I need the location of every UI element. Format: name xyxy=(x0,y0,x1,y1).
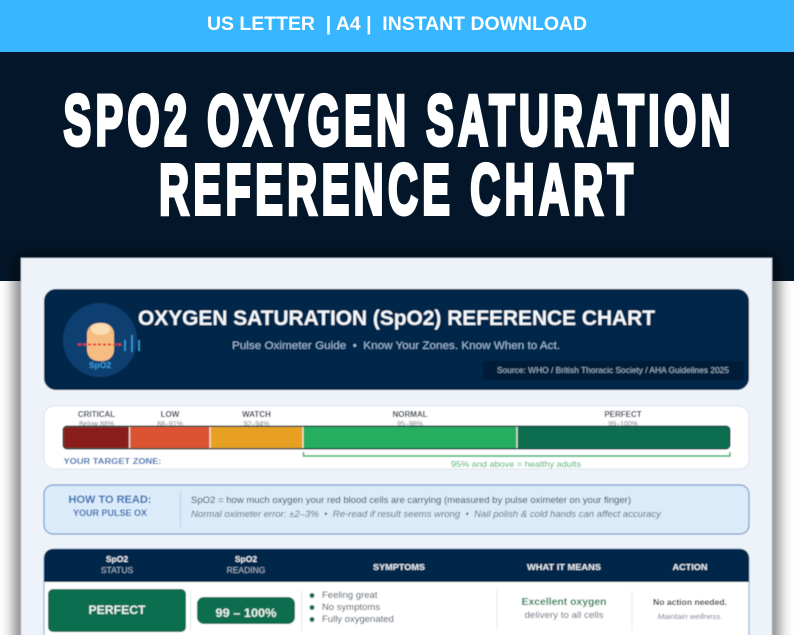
symptoms list: Fully oxygenated xyxy=(322,614,394,625)
main title: SPO2 OXYGEN SATURATION xyxy=(64,81,731,161)
table header: ACTION xyxy=(672,562,708,572)
table header: READING xyxy=(227,565,265,575)
table header: SpO2 xyxy=(235,554,257,564)
panel: saturation scale xyxy=(44,406,749,469)
meaning xyxy=(522,597,606,621)
scale labels: 95–98% xyxy=(397,421,423,428)
symptoms list xyxy=(310,590,394,625)
table header xyxy=(44,549,749,582)
panel: how to read: YOUR PULSE OX xyxy=(73,508,147,518)
scale labels: 99–100% xyxy=(608,421,638,428)
meaning: delivery to all cells xyxy=(524,610,604,621)
status badge: PERFECT xyxy=(88,603,146,617)
sheet shadow xyxy=(14,254,779,635)
scale labels: WATCH xyxy=(242,410,271,419)
scale labels: PERFECT xyxy=(604,410,642,419)
status badge xyxy=(48,589,186,632)
scale labels: NORMAL xyxy=(392,410,428,419)
row: perfect xyxy=(48,589,727,632)
top banner xyxy=(0,0,794,52)
panel: how to read: Normal oximeter error: ±2–3% • Re-read if result seems wrong • Nail polish & cold hands can affect accuracy xyxy=(191,509,662,519)
action: Maintain wellness. xyxy=(658,612,722,621)
table header: STATUS xyxy=(101,565,133,575)
document sheet xyxy=(21,258,772,635)
top banner: US LETTER | A4 | INSTANT DOWNLOAD xyxy=(207,13,587,35)
scale labels: 92–94% xyxy=(244,421,269,428)
scale labels: Below 88% xyxy=(79,421,114,428)
table header: SYMPTOMS xyxy=(373,562,425,572)
target zone note: 95% and above = healthy adults xyxy=(451,459,581,469)
scale labels: LOW xyxy=(161,410,180,419)
panel: chart header xyxy=(44,289,749,390)
source note xyxy=(483,361,744,380)
action: No action needed. xyxy=(653,597,727,607)
scale bar xyxy=(63,426,730,449)
table header: SpO2 xyxy=(106,554,128,564)
symptoms list: Feeling great xyxy=(322,590,378,601)
dark title band xyxy=(0,52,794,281)
icon: finger with pulse oximeter: SpO2 xyxy=(89,360,111,370)
header title: OXYGEN SATURATION (SpO2) REFERENCE CHART xyxy=(138,307,655,330)
scale labels xyxy=(78,410,642,428)
scale labels: 88–91% xyxy=(157,421,183,428)
target zone label: YOUR TARGET ZONE: xyxy=(64,456,162,466)
action xyxy=(653,597,727,621)
symptoms list: No symptoms xyxy=(322,602,380,613)
table header: WHAT IT MEANS xyxy=(527,562,601,572)
target zone bracket xyxy=(304,452,730,456)
scale labels: CRITICAL xyxy=(78,410,115,419)
header subtitle: Pulse Oximeter Guide • Know Your Zones. Know When to Act. xyxy=(232,340,560,352)
main title xyxy=(64,81,731,230)
source note: Source: WHO / British Thoracic Society / AHA Guidelines 2025 xyxy=(497,365,729,375)
how to read body: SpO2 = how much oxygen your red blood cells are carrying (measured by pulse oximeter on your finger) xyxy=(191,495,631,506)
meaning: Excellent oxygen xyxy=(522,597,606,608)
main title: REFERENCE CHART xyxy=(159,150,633,230)
how to read heading: HOW TO READ: xyxy=(69,494,151,506)
reading pill: 99 – 100% xyxy=(216,606,277,620)
panel: reference table xyxy=(44,549,749,635)
reading pill xyxy=(197,597,295,624)
panel: how to read xyxy=(44,485,749,534)
icon: finger with pulse oximeter xyxy=(63,303,139,377)
